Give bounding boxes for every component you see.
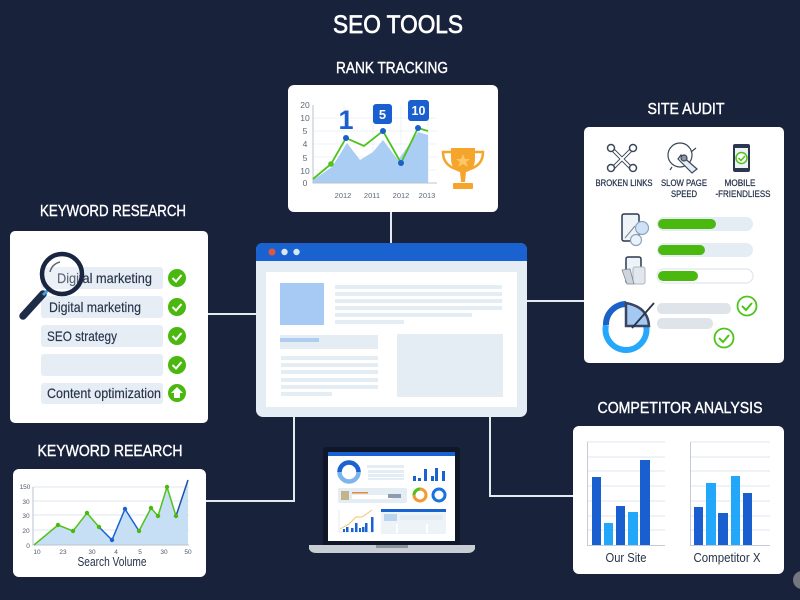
bar chart: competitor x: [690, 442, 770, 546]
search volume chart: 30: [88, 549, 96, 556]
icon: trophy: [443, 148, 483, 189]
rank badge 1: 1: [338, 105, 354, 135]
icon: hand with phone: [622, 257, 645, 284]
laptop donut: [340, 462, 358, 482]
rank line chart: 4: [303, 139, 308, 149]
audit labels: MOBILE: [724, 178, 756, 189]
laptop stat panel: [338, 488, 407, 503]
rank line chart: 10: [300, 166, 310, 176]
panel: search volume: [13, 469, 206, 577]
rank line chart: 2013: [419, 191, 435, 200]
search volume chart: 20: [22, 528, 30, 535]
laptop trend chart: [339, 510, 374, 532]
audit labels: [596, 178, 770, 200]
keyword rows: [41, 267, 163, 404]
search volume chart: 150: [20, 484, 31, 491]
check icons: [168, 269, 186, 402]
status rows with checks: [657, 296, 756, 348]
search volume chart: 23: [59, 549, 67, 556]
laptop table panel: [381, 509, 446, 534]
rank line chart: 10: [300, 113, 310, 123]
heading: site audit: SITE AUDIT: [648, 101, 725, 118]
left content block: [280, 335, 378, 396]
panel: rank tracking: [288, 85, 498, 212]
panel: site audit: [584, 127, 784, 363]
search volume chart: 30: [22, 513, 30, 520]
rank badge 5: 5: [379, 107, 386, 122]
search volume chart: 30: [22, 499, 30, 506]
competitor chart labels: [606, 551, 761, 565]
keyword rows: Digital marketing: [57, 270, 152, 286]
browser title bar: [256, 243, 527, 261]
image placeholder: [280, 283, 324, 325]
rank badge 10: 10: [412, 104, 425, 118]
laptop bars: [413, 468, 445, 481]
icon: slow page speed: [668, 143, 697, 173]
heading: keyword research: KEYWORD RESEARCH: [40, 203, 186, 220]
rank line chart: 5: [303, 126, 308, 136]
right content block: [397, 334, 503, 397]
rank badge 10: [408, 100, 429, 121]
heading: competitor analysis: COMPETITOR ANALYSIS: [598, 400, 762, 417]
chart caption: Search Volume: [78, 555, 147, 569]
donut and pie icon: [605, 303, 654, 350]
keyword rows: SEO strategy: [47, 328, 117, 344]
search volume chart: 4: [114, 549, 118, 556]
search volume chart: 5: [138, 549, 142, 556]
rank line chart: 2012: [335, 191, 351, 200]
keyword rows: Digital marketing: [49, 299, 141, 315]
icon: magnifying glass: [23, 254, 82, 316]
search volume chart: 30: [160, 549, 168, 556]
audit labels: SPEED: [671, 189, 697, 200]
title: SEO TOOLS: [333, 11, 463, 39]
bar chart: our site: [587, 442, 665, 546]
audit labels: BROKEN LINKS: [596, 178, 652, 189]
rank line chart: 5: [303, 153, 308, 163]
rank line chart: 2011: [364, 191, 380, 200]
connectors between hub and panels: [206, 212, 584, 501]
competitor chart labels: Competitor X: [694, 551, 761, 565]
laptop base: [309, 545, 475, 553]
icon: phone with magnifiers: [622, 214, 648, 246]
icon: mobile friendly: [733, 144, 750, 172]
heading: keyword reearch: KEYWORD REEARCH: [38, 443, 182, 460]
heading: rank tracking: RANK TRACKING: [336, 60, 448, 77]
central browser window: [256, 243, 527, 417]
competitor chart labels: Our Site: [606, 551, 647, 565]
search volume chart: [20, 480, 192, 556]
rank badge 5: [373, 104, 392, 124]
corner dot: [793, 571, 800, 589]
icon: broken links: [608, 144, 636, 172]
rank line chart: 2012: [393, 191, 409, 200]
rank line chart: 20: [300, 100, 310, 110]
laptop text lines: [367, 465, 404, 480]
search volume chart: 0: [26, 543, 30, 550]
progress bars: [657, 217, 753, 283]
top text lines: [335, 285, 502, 324]
search volume chart: 10: [33, 549, 41, 556]
panel: keyword research: [10, 231, 208, 423]
rank line chart: 0: [303, 178, 308, 188]
panel: competitor analysis: [573, 426, 784, 574]
laptop small donuts: [414, 489, 445, 501]
audit labels: -FRIENDLIESS: [716, 189, 770, 200]
keyword rows: Content optimization: [47, 385, 161, 401]
search volume chart: 50: [184, 549, 192, 556]
laptop dashboard: [309, 447, 475, 553]
rank line chart: [300, 100, 437, 200]
audit labels: SLOW PAGE: [661, 178, 707, 189]
